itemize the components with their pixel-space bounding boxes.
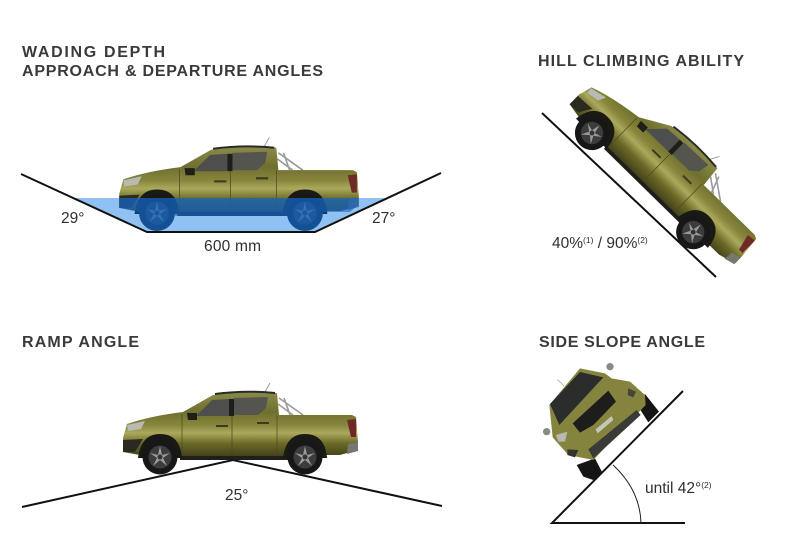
label: climbing percentages: (1) <box>583 235 594 245</box>
diagram: hill climbing <box>542 56 781 281</box>
heading: hill climbing ability: HILL CLIMBING ABILITY <box>538 53 744 70</box>
truck: side view in water <box>119 138 359 231</box>
label: side slope angle: (2) <box>701 480 712 490</box>
diagram: side slope <box>543 363 712 523</box>
heading: ramp angle: RAMP ANGLE <box>22 334 139 351</box>
label: side slope angle: until 42° <box>645 480 701 497</box>
label: departure angle: 27° <box>372 210 395 227</box>
ramp profile <box>22 460 442 507</box>
label: ramp angle: 25° <box>225 487 248 504</box>
label: climbing percentages: (2) <box>637 235 648 245</box>
label: climbing percentages: 40% <box>552 235 583 252</box>
truck: front view on side slope <box>543 363 659 480</box>
heading: wading depth, approach and departure angles: APPROACH & DEPARTURE ANGLES <box>22 63 323 80</box>
label: wading depth: 600 mm <box>204 238 261 255</box>
heading: wading depth, approach and departure angles <box>22 44 323 80</box>
diagram: wading depth <box>21 138 441 255</box>
heading: side slope angle: SIDE SLOPE ANGLE <box>539 334 705 351</box>
submerged truck tint <box>120 198 358 231</box>
heading: wading depth, approach and departure angles: WADING DEPTH <box>22 44 165 61</box>
diagram: ramp angle <box>22 383 442 507</box>
slope line <box>542 113 716 277</box>
slope and ground lines <box>552 391 685 523</box>
truck: climbing <box>554 56 781 281</box>
ground profile: approach and departure <box>21 173 441 232</box>
label: climbing percentages: / 90% <box>593 235 638 252</box>
angle arc <box>613 465 641 523</box>
label: approach angle: 29° <box>61 210 84 227</box>
water overlay <box>75 198 387 232</box>
truck: on ramp <box>123 383 358 474</box>
